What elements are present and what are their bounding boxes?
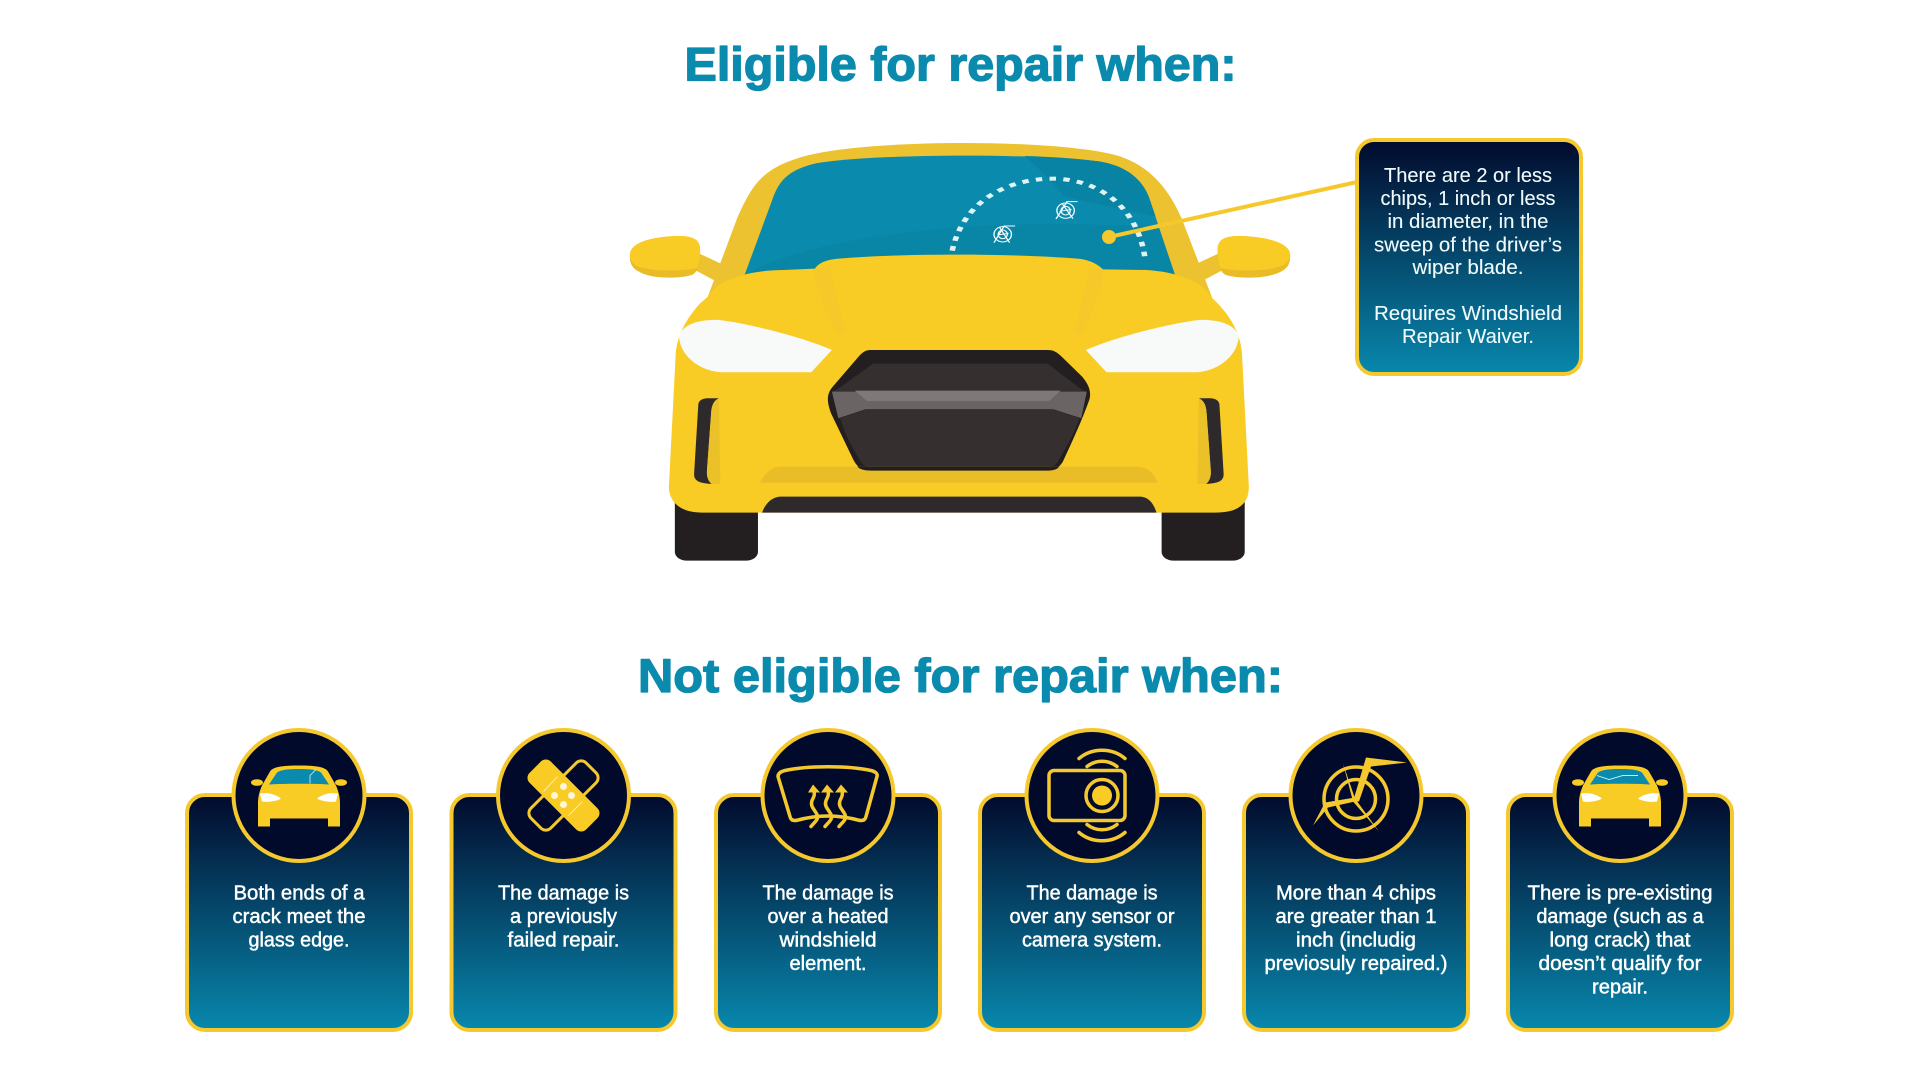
card text: [762, 882, 894, 975]
card text: [1264, 882, 1448, 975]
card text: glass edge.: [248, 930, 350, 952]
left vent: [694, 398, 719, 484]
grille inner upper: [832, 364, 1086, 392]
card text: There is pre-existing: [1528, 882, 1712, 904]
panel: sensor or camera: [980, 730, 1204, 1030]
callout text: chips, 1 inch or less: [1380, 188, 1556, 210]
icon: chip with cracks: [1313, 758, 1407, 832]
right vent strip: [1197, 398, 1211, 484]
card text: over any sensor or: [1010, 906, 1175, 928]
right mirror arm: [1196, 253, 1226, 281]
callout text: sweep of the driver’s: [1374, 234, 1562, 256]
card text: a previously: [510, 906, 617, 928]
right mirror face: [1218, 236, 1290, 271]
card text: The damage is: [498, 882, 629, 904]
card text: repair.: [1592, 976, 1648, 998]
card text: inch (includig: [1296, 930, 1416, 952]
card text: previosuly repaired.): [1264, 953, 1448, 975]
panel: heated windshield element: [716, 730, 940, 1030]
left mirror face: [630, 236, 700, 271]
card text: [232, 882, 366, 952]
callout text: There are 2 or less: [1384, 165, 1552, 187]
card text: over a heated: [768, 906, 888, 928]
grille inner lower: [840, 410, 1079, 467]
lower bumper shade: [760, 467, 1158, 483]
card text: failed repair.: [508, 930, 620, 952]
card text: damage (such as a: [1536, 906, 1704, 928]
right headlight: [1086, 320, 1239, 372]
icon: camera sensor: [1049, 750, 1125, 841]
panel: more than four chips: [1244, 730, 1468, 1030]
card text: are greater than 1: [1276, 906, 1436, 928]
hood crease right: [1074, 266, 1104, 333]
card text: crack meet the: [232, 906, 366, 928]
card text: windshield: [778, 930, 876, 952]
illustration: yellow car front view: [630, 143, 1290, 561]
left vent strip: [707, 398, 720, 484]
grille band: [832, 392, 1087, 418]
chip left: [994, 226, 1015, 243]
card text: More than 4 chips: [1276, 882, 1436, 904]
title: eligible: Eligible for repair when:: [684, 38, 1236, 90]
callout text: in diameter, in the: [1388, 211, 1548, 233]
right vent: [1199, 398, 1224, 484]
car body: [669, 255, 1249, 513]
card text: camera system.: [1022, 930, 1162, 952]
windshield: [744, 156, 1175, 278]
icon: heated windshield: [778, 767, 877, 826]
grille: [828, 350, 1090, 471]
panel: pre-existing damage: [1508, 730, 1732, 1030]
right wheel: [1162, 487, 1245, 561]
windshield shade lower: [744, 224, 1175, 276]
card text: [1010, 882, 1175, 952]
callout text: [1374, 165, 1562, 348]
card text: doesn’t qualify for: [1538, 953, 1702, 975]
card text: [498, 882, 629, 952]
right mirror: [1218, 236, 1290, 278]
left headlight: [679, 320, 832, 372]
grille band highlight: [855, 391, 1061, 401]
callout box: eligible criteria: [1357, 140, 1581, 374]
panel: crack meets edge: [187, 730, 411, 1030]
card text: The damage is: [762, 882, 894, 904]
card text: element.: [790, 953, 866, 975]
card text: long crack) that: [1550, 930, 1691, 952]
card text: [1528, 882, 1712, 998]
icon: car with long crack: [1572, 766, 1668, 826]
icon: crossed bandages: [525, 757, 602, 834]
card text: The damage is: [1026, 882, 1158, 904]
callout text: Requires Windshield: [1374, 303, 1562, 325]
card text: Both ends of a: [234, 882, 365, 904]
grille bottom edge over bumper: [857, 467, 1059, 471]
left mirror arm: [692, 253, 722, 281]
wiper sweep arc: [952, 179, 1145, 259]
callout leader line and dot: [1102, 182, 1357, 244]
chip right: [1056, 202, 1078, 219]
roof and pillars: [707, 143, 1213, 300]
left mirror: [630, 236, 700, 278]
title: not eligible: Not eligible for repair when:: [638, 649, 1283, 702]
windshield shade upper right: [1025, 156, 1156, 217]
callout text: wiper blade.: [1411, 257, 1524, 279]
lower air intake: [762, 497, 1157, 513]
icon: car with vertical crack: [251, 766, 347, 826]
callout text: Repair Waiver.: [1402, 326, 1534, 348]
left wheel: [675, 487, 758, 561]
hood crease left: [814, 266, 846, 333]
panel: previously failed repair: [452, 730, 676, 1030]
